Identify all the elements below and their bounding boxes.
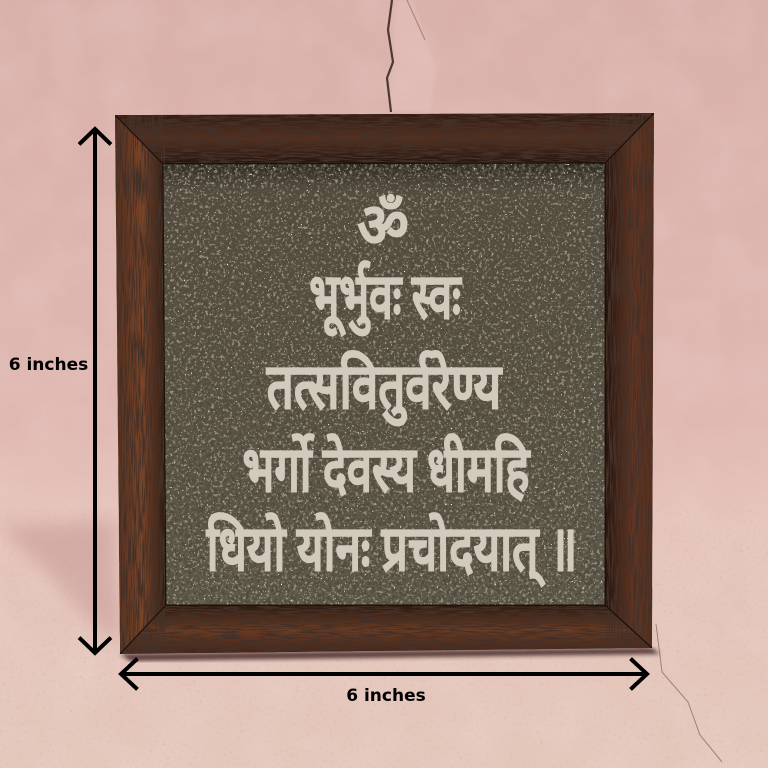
line: bhur bhuvah svah: भूर्भुवः स्वः <box>309 261 462 337</box>
label: horizontal 6 inches: 6 inches <box>346 686 426 706</box>
vertical dimension arrow <box>80 129 110 653</box>
label: vertical 6 inches: 6 inches <box>9 355 88 375</box>
panel: pyrite sand background <box>160 160 610 610</box>
line: bhargo devasya dhimahi: भर्गो देवस्य धीमहि <box>243 434 531 505</box>
frame shadow <box>120 648 660 661</box>
line: tat savitur varenyam: तत्सवितुर्वरेण्य <box>266 350 503 426</box>
line: dhiyo yonah prachodayat: धियो योनः प्रचोदयात् ॥ <box>206 512 577 588</box>
wooden frame <box>115 113 654 654</box>
mantra text <box>206 192 577 588</box>
horizontal dimension arrow <box>121 660 647 688</box>
om symbol: ॐ <box>357 192 409 259</box>
